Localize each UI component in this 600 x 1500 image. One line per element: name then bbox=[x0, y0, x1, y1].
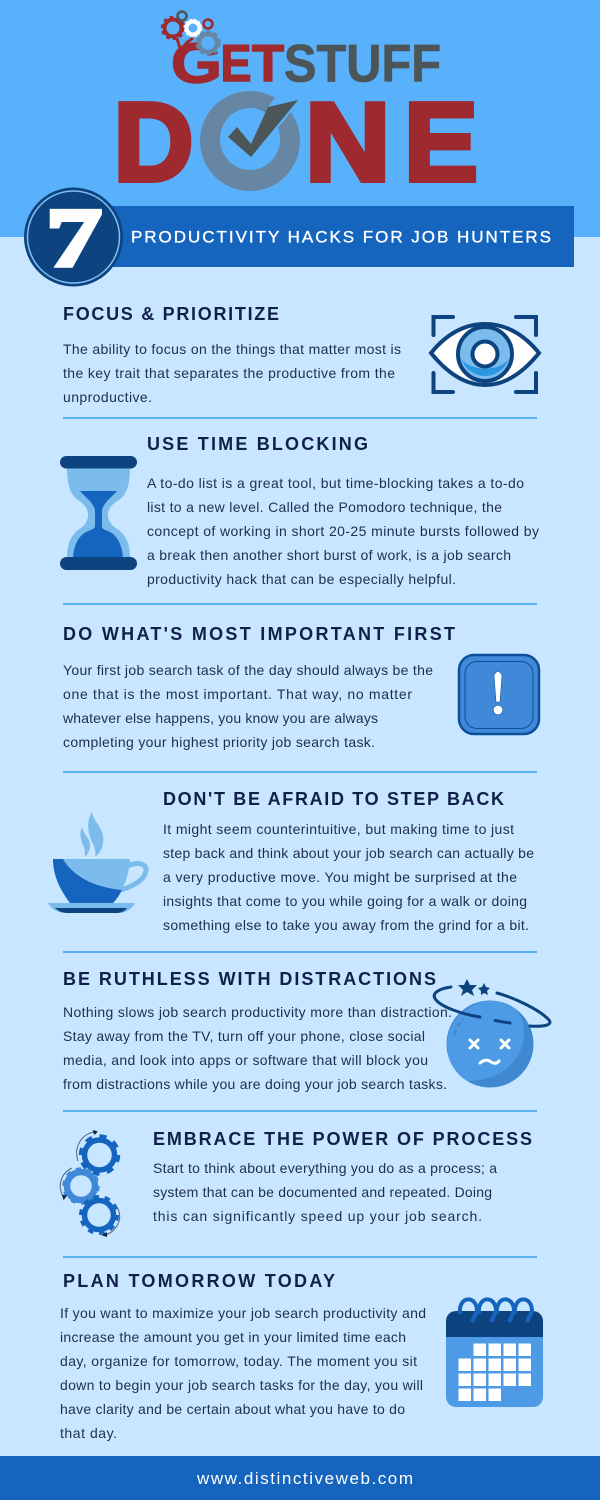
body text: completing your highest priority job search task. bbox=[63, 734, 375, 750]
body text: It might seem counterintuitive, but making time to just bbox=[163, 821, 514, 837]
body text: concept of working in short 20-25 minute bursts followed by bbox=[147, 523, 539, 539]
body text: unproductive. bbox=[63, 389, 152, 405]
body text bbox=[163, 821, 534, 933]
title banner bbox=[24, 188, 574, 286]
body text: something else to take you away from the grind for a bit. bbox=[163, 917, 529, 933]
section 7: plan tomorrow bbox=[60, 1271, 543, 1441]
body text bbox=[60, 1305, 426, 1441]
body text: insights that come to you while going for a walk or doing bbox=[163, 893, 527, 909]
body text bbox=[147, 475, 539, 587]
icon: exclamation mark bbox=[459, 655, 539, 734]
header background bbox=[0, 0, 600, 237]
website link: www.distinctiveweb.com bbox=[196, 1469, 413, 1488]
logo letter G: G bbox=[171, 32, 222, 96]
icon: eye bbox=[431, 317, 539, 392]
body text: list to a new level. Called the Pomodoro technique, the bbox=[147, 499, 502, 515]
section 3: most important first bbox=[62, 624, 539, 750]
body text: the key trait that separates the productive from the bbox=[63, 365, 395, 381]
body text: A to-do list is a great tool, but time-blocking takes a to-do bbox=[147, 475, 524, 491]
body text: from distractions while you are doing your job search tasks. bbox=[63, 1076, 447, 1092]
heading: USE TIME BLOCKING bbox=[147, 434, 368, 454]
heading: BE RUTHLESS WITH DISTRACTIONS bbox=[63, 969, 436, 989]
section 2: time blocking bbox=[60, 434, 539, 587]
logo letter N: N bbox=[305, 80, 390, 204]
body text: If you want to maximize your job search productivity and bbox=[60, 1305, 426, 1321]
section 4: step back bbox=[48, 789, 534, 933]
body text bbox=[62, 662, 433, 750]
logo letter E: E bbox=[220, 35, 252, 93]
icon: calendar bbox=[446, 1299, 543, 1407]
heading: EMBRACE THE POWER OF PROCESS bbox=[153, 1129, 532, 1149]
section 5: distractions bbox=[63, 969, 550, 1092]
body text bbox=[153, 1160, 497, 1224]
heading: FOCUS & PRIORITIZE bbox=[63, 304, 279, 324]
body text: media, and look into apps or software that will block you bbox=[63, 1052, 428, 1068]
icon: coffee cup bbox=[48, 812, 146, 913]
body text: that day. bbox=[60, 1425, 117, 1441]
body text: Stay away from the TV, turn off your phone, close social bbox=[63, 1028, 425, 1044]
body text bbox=[63, 1004, 452, 1092]
body text: day, organize for tomorrow, today. The moment you sit bbox=[60, 1353, 417, 1369]
logo word STUFF: STUFF bbox=[284, 34, 441, 94]
section 6: power of process bbox=[60, 1129, 532, 1236]
logo gears bbox=[162, 12, 220, 54]
logo letter E: E bbox=[404, 80, 478, 204]
body text: whatever else happens, you know you are always bbox=[62, 710, 378, 726]
heading: PLAN TOMORROW TODAY bbox=[63, 1271, 335, 1291]
divider bbox=[63, 417, 537, 419]
number badge: 7 bbox=[46, 192, 102, 285]
logo check mark bbox=[228, 100, 298, 157]
body text: Nothing slows job search productivity more than distraction. bbox=[63, 1004, 452, 1020]
number badge bbox=[24, 188, 123, 286]
body text: have clarity and be certain about what you have to do bbox=[60, 1401, 405, 1417]
divider bbox=[63, 771, 537, 773]
logo: Get Stuff Done bbox=[114, 12, 478, 204]
divider bbox=[63, 1256, 537, 1258]
heading: DO WHAT'S MOST IMPORTANT FIRST bbox=[63, 624, 455, 644]
logo ring O bbox=[200, 91, 300, 191]
logo letter D: D bbox=[114, 80, 194, 204]
body text: system that can be documented and repeated. Doing bbox=[153, 1184, 492, 1200]
banner bar bbox=[100, 206, 574, 267]
body text: one that is the most important. That way, no matter bbox=[63, 686, 412, 702]
footer bbox=[0, 1456, 600, 1500]
divider bbox=[63, 603, 537, 605]
banner title: PRODUCTIVITY HACKS FOR JOB HUNTERS bbox=[131, 228, 551, 246]
body text: The ability to focus on the things that matter most is bbox=[63, 341, 401, 357]
body text: Your first job search task of the day should always be the bbox=[63, 662, 433, 678]
icon: dizzy face bbox=[434, 979, 550, 1088]
body text: increase the amount you get in your limited time each bbox=[60, 1329, 406, 1345]
body text: this can significantly speed up your job search. bbox=[153, 1208, 482, 1224]
heading: DON'T BE AFRAID TO STEP BACK bbox=[163, 789, 504, 809]
logo letter T: T bbox=[252, 35, 284, 93]
body text: down to begin your job search tasks for the day, you will bbox=[60, 1377, 423, 1393]
body text: step back and think about your job search can actually be bbox=[163, 845, 534, 861]
icon: gears bbox=[60, 1131, 120, 1236]
divider bbox=[63, 951, 537, 953]
body text: productivity hack that can be especially helpful. bbox=[147, 571, 456, 587]
section 1: focus and prioritize bbox=[63, 304, 539, 405]
icon: hourglass bbox=[60, 456, 137, 570]
divider bbox=[63, 1110, 537, 1112]
body text bbox=[63, 341, 401, 405]
body text: Start to think about everything you do as a process; a bbox=[153, 1160, 497, 1176]
body text: a break then another short burst of work, is a job search bbox=[147, 547, 511, 563]
body text: a very productive move. You might be surprised at the bbox=[163, 869, 517, 885]
